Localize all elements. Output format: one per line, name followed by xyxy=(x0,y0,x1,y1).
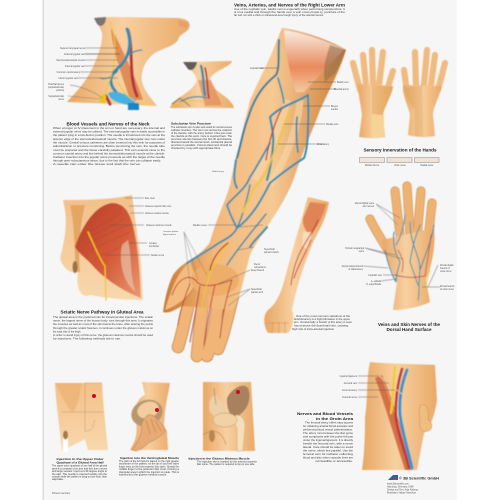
right palm and wrist xyxy=(403,85,442,137)
neck labels xyxy=(48,47,86,101)
heading: sciatic: Sciatic Nerve Pathway in Gluteal Area xyxy=(60,310,144,314)
fingers xyxy=(353,50,393,90)
arm labels: palmar arch xyxy=(251,291,264,294)
palmar arteries xyxy=(172,277,232,345)
arm labels: Radial artery xyxy=(212,170,225,173)
heading: subclavian: Subclavian Vein Puncture xyxy=(171,122,211,126)
pale tendons xyxy=(121,240,136,292)
logo details: www.3bscientific.com xyxy=(387,482,409,486)
upper arm labels: Basilic vein xyxy=(337,82,349,84)
subclavian vein xyxy=(201,66,205,95)
dorsal nerve xyxy=(425,270,430,288)
text block: subclavian: puncture site lies between the first rib and clavicle, xyxy=(171,137,232,141)
quadrant grid xyxy=(62,383,103,431)
text block: fist caption xyxy=(292,314,352,331)
logo details: Illustration: Holger Vanselow xyxy=(387,492,416,494)
upper arm labels: tendon xyxy=(331,108,339,111)
wrist pale panel xyxy=(372,115,384,137)
median cubital vein xyxy=(267,95,308,180)
hip joint xyxy=(213,413,237,427)
text block: subclavian xyxy=(171,125,233,150)
text block: ventrogluteal: middle finger to the posterior iliac crest, forming a xyxy=(119,468,180,471)
text block: neck: common carotid artery and lies behind the sternocleidomastoid muscle at the clavicle. xyxy=(53,151,165,155)
groin labels: Femoral artery xyxy=(342,389,358,392)
neck labels: External jugular vein xyxy=(64,53,86,56)
text block: neck: anterior edge of the sternocleidomastoid muscle. The internal jugular vein runs under xyxy=(53,137,165,141)
illustration: ventrogluteal xyxy=(128,382,170,451)
gluteal skin xyxy=(60,195,143,300)
muscle edge xyxy=(381,376,412,470)
dorsal hand labels: A. radialis xyxy=(371,280,382,283)
sensory zone stripes xyxy=(372,85,393,115)
cleft xyxy=(63,438,68,452)
text block: ventrogluteal: triangular area in which the injection is made. This is xyxy=(119,471,180,474)
text block: sciatic xyxy=(53,315,153,341)
text block: upper quadrant: the skin. The needle is inserted quickly into the xyxy=(52,473,108,476)
text block: groin: The artery runs between the iliac spine xyxy=(303,431,353,435)
heading line two: Dorsal Hand Surface xyxy=(386,327,432,332)
median forearm vein xyxy=(187,117,298,263)
forearm muscle xyxy=(303,202,326,236)
dorsal hand labels: and nerves xyxy=(363,205,375,208)
finger fills xyxy=(178,296,233,356)
dorsal arteries xyxy=(395,235,431,277)
forearm arteries xyxy=(291,220,318,285)
genitals xyxy=(419,405,432,431)
palm nerve xyxy=(202,268,212,312)
text block: subclavian: checked by x-ray with appropriate films. xyxy=(171,146,221,150)
dorsal hand labels: of radial artery xyxy=(348,268,364,271)
inguinal ligament xyxy=(379,376,412,402)
neck labels: nerve xyxy=(58,98,65,101)
text block: neck: through open subcutaneous tissue, due to the fact that the vein can collapse easily. xyxy=(53,159,161,163)
legend: sensory nerves: Radial nerve xyxy=(421,164,434,167)
heading: groin xyxy=(297,411,354,421)
text block: sciatic: through the greater sciatic foramen, it continues under the gluteus maximus on xyxy=(53,326,153,330)
arm labels: Deep branch xyxy=(251,269,265,272)
upper arm labels: Ulnar artery xyxy=(317,143,330,146)
arm labels: digital arteries xyxy=(163,233,176,236)
back skin xyxy=(203,382,255,451)
text block: neck: external jugular veins may be utilized. The external jugular vein is easily accessible in xyxy=(53,130,165,134)
arm labels: palmar branch xyxy=(264,251,279,254)
groin label lines xyxy=(358,376,395,397)
text block: sciatic: the muscles as well as most of the skin below the knee. After leaving the pelvis xyxy=(53,322,153,326)
injection point xyxy=(92,394,96,398)
gluteal labels: Greater xyxy=(149,242,157,245)
logo details: Hamburg, Germany, 1998 xyxy=(387,486,414,488)
groin labels: Femoral vein xyxy=(344,382,358,385)
illustration: gluteal region xyxy=(60,195,150,300)
gluteal labels xyxy=(145,197,172,257)
neck labels: Supraclavicular xyxy=(48,95,64,98)
text block: upper quadrant: and large vessels. Inject at a 90 degree angle to xyxy=(52,470,108,473)
accessory vein xyxy=(278,78,284,103)
text block: gluteus medius xyxy=(197,460,257,466)
text block: gluteus medius: The injection site is marked by the anterior superior xyxy=(197,460,257,464)
forearm muscle tendons xyxy=(255,100,300,185)
right hand fingers xyxy=(404,50,445,92)
text block: neck: the muscle. Central venous catheters are often inserted into this vein for purposes of xyxy=(53,141,165,145)
sartorius muscle xyxy=(375,375,413,470)
neck labels: Brachial plexus xyxy=(48,83,65,86)
text block: fist caption: One of the most common variations of the xyxy=(296,314,350,318)
legend: sensory nerves: Ulnar nerve xyxy=(394,164,407,167)
ilium xyxy=(227,386,250,417)
thigh skin xyxy=(362,362,437,470)
gluteal label lines xyxy=(105,198,150,255)
footer note: Printed in Germany xyxy=(52,492,71,495)
femoral artery xyxy=(396,369,409,468)
dorsal hand labels: Dorsal carpal branch xyxy=(342,265,364,268)
heading: groin: Nerves and Blood Vessels xyxy=(297,411,353,416)
basilic vein xyxy=(237,95,308,228)
text block: subclavian: directed toward the sternal notch. Accidental pleural xyxy=(171,140,232,144)
muscle xyxy=(198,80,222,106)
femoral vein xyxy=(400,370,412,468)
dorsal hand right labels: of ulnar nerve xyxy=(440,288,455,291)
text block: subclavian: catheter insertion. The vein runs across the midpoint xyxy=(171,128,232,132)
arm labels: Median nerve xyxy=(193,224,208,227)
pelvis bones xyxy=(209,395,225,426)
arm labels: retinaculum xyxy=(254,266,266,269)
text block: subclavian: of the clavicle, with the artery behind. It lies just under xyxy=(171,131,232,135)
cubital labels xyxy=(259,68,336,144)
arm labels xyxy=(163,170,279,294)
gluteus maximus xyxy=(75,203,141,298)
finger outlines xyxy=(370,186,432,252)
gluteal labels: Gluteus medius muscle xyxy=(145,212,170,215)
text block: neck xyxy=(53,126,165,166)
upper arm labels: Median vein xyxy=(326,124,339,126)
heading: upper quadrant: Injection in the Upper Outer xyxy=(56,457,105,461)
text block: sciatic: the back side of the thigh. xyxy=(53,329,81,333)
finger lines xyxy=(146,419,161,434)
upper arm labels: Brachial artery xyxy=(334,88,350,91)
dorsal hand labels: Cephalic vein xyxy=(368,275,383,277)
fist fingers xyxy=(268,322,289,333)
logo details xyxy=(387,482,418,494)
dorsal hand right labels: Dorsal digital xyxy=(440,264,454,267)
thumb xyxy=(165,262,197,310)
dorsal hand labels: Dorsal metacarpal xyxy=(345,247,364,250)
text block: groin: performing blood vessel catheterization. xyxy=(303,428,353,432)
text block: groin: the nerve, which lies parallel. Use the xyxy=(303,448,353,452)
heading: dorsal hand: Veins and Skin Nerves of the xyxy=(378,322,441,327)
logo details: Design and Text: Anja Kolberg xyxy=(387,488,418,492)
gluteal labels: Iliac crest xyxy=(145,197,155,200)
text block: sciatic: nerve, the largest nerve of the human body, runs through this area. It originates xyxy=(53,319,153,323)
gluteal labels: Gluteus maximus muscle xyxy=(146,224,172,227)
iliac bone xyxy=(128,395,166,431)
dorsal hand labels xyxy=(342,202,383,286)
text block: groin: femoral vein for catheter collecting xyxy=(303,452,353,456)
back of hand xyxy=(382,228,435,310)
subclavian blue stem xyxy=(128,103,139,110)
upper arm labels: Cephalic vein xyxy=(250,68,265,70)
femur xyxy=(235,415,245,451)
text block: neck: When a longer or IV placement in the arm or hand are necessary, the internal and xyxy=(53,126,165,130)
text block: upper quadrant: aspirate. xyxy=(52,478,64,481)
arm and palm xyxy=(163,28,346,313)
illustration: upper outer quadrant xyxy=(55,383,108,452)
cephalic vein xyxy=(237,40,279,158)
text block: groin: blood and also when vascular lines are xyxy=(303,456,353,460)
upper arm labels xyxy=(250,68,350,146)
text block: fist caption: brachial artery is a high bifurcation in the upper xyxy=(294,317,350,321)
heading: upper quadrant: Quadrant of a Gluteal Area Half xyxy=(56,460,104,464)
legend: sensory nerves: Median Nerve xyxy=(365,164,380,167)
text block: sciatic: In order to avoid injury of this nerve, the gluteus maximus muscle should be used xyxy=(53,333,153,337)
text block: sciatic: for injections. The following methods are in use. xyxy=(53,337,121,341)
inner pelvis xyxy=(135,399,161,421)
hair xyxy=(94,17,106,26)
dorsal veins xyxy=(385,215,434,300)
dorsal hand right labels: ulnar nerve xyxy=(440,270,452,273)
sternocleidomastoid muscle xyxy=(111,28,143,100)
text block: groin: and symphysis with the pulse felt just xyxy=(303,434,353,438)
thumb crease xyxy=(176,282,197,307)
groin labels xyxy=(340,375,358,399)
logo mark xyxy=(388,475,398,480)
neck labels: Sternocleidomastoid muscle xyxy=(56,59,86,62)
median nerve xyxy=(243,110,290,212)
illustration: main arm and hand xyxy=(163,28,346,356)
heading: upper quadrant xyxy=(56,457,105,464)
gluteal labels: trochanter xyxy=(149,245,160,248)
illustration: gluteus medius xyxy=(203,382,255,451)
dorsal hand labels: N. superficialis xyxy=(366,283,382,286)
text block: groin: under the inguinal ligament. It is directly xyxy=(303,438,353,442)
neck skin xyxy=(67,17,190,106)
text block: groin xyxy=(303,420,353,463)
text block: subclavian: The subclavian vein is also well-suited for central venous xyxy=(171,125,233,129)
text block: neck: administration or pressure monitoring. Before puncturing the vein, the needle tube xyxy=(53,144,165,148)
text block: ventrogluteal xyxy=(119,460,180,477)
sciatic nerve xyxy=(88,232,105,266)
text block: gluteus medius: iliac spine. The patient is required to lay on one side. xyxy=(197,463,255,466)
striped sensory area xyxy=(405,85,423,137)
muscle fibres xyxy=(86,212,132,258)
text block: neck: A needle can enter the tissue and stab the nerve. xyxy=(53,162,141,166)
injector hand xyxy=(132,415,165,451)
cleft xyxy=(209,430,215,442)
plexus vessels xyxy=(180,97,207,102)
subclavian vein xyxy=(108,92,136,106)
forearm xyxy=(264,197,329,333)
text block: neck: the patient lying in a low-flexion position. The needle is introduced into the vein at the xyxy=(53,133,165,137)
carotid artery xyxy=(128,30,137,96)
dorsal hand right labels xyxy=(440,264,455,291)
upper arm labels: Biceps xyxy=(331,106,339,108)
illustration: groin xyxy=(358,362,437,470)
antecubital fan muscle xyxy=(284,30,344,92)
buttock skin xyxy=(55,383,108,451)
heading: ventrogluteal: Injection into the Ventrogluteal Muscle xyxy=(120,456,179,460)
text block: main: is on a medial and through the hands over a vein cross proper-ly, puncture of the xyxy=(234,10,345,14)
groin labels: Femoral nerve xyxy=(342,396,358,399)
palm center xyxy=(191,264,239,296)
illustration: dorsal hand xyxy=(363,186,440,310)
logo mark accent xyxy=(392,477,398,480)
arm labels: Flexor xyxy=(254,263,261,266)
text block: ventrogluteal: The palm of the left hand is placed on the right greater xyxy=(119,460,179,463)
lips xyxy=(178,20,189,28)
neck labels: Common carotid artery xyxy=(57,71,81,74)
dorsal hand label lines xyxy=(363,204,440,287)
heading: main: Veins, Arteries, and Nerves of the Right Lower Arm xyxy=(234,2,345,8)
label lines xyxy=(68,48,122,99)
gluteal labels: Gluteus superior iliac vein xyxy=(145,205,172,208)
wrist label dashed lines xyxy=(184,232,207,285)
neck labels: Inferior jugular vein xyxy=(58,77,79,80)
neck labels: Superior laryngeal nerve xyxy=(60,47,86,50)
text block: ventrogluteal: finger rests on the front superior iliac spine. Spread the xyxy=(119,465,180,468)
text block: subclavian: puncture is possible. Correct placement should be xyxy=(171,143,233,147)
text block: groin: beside the femoral vein, with a nerve xyxy=(303,442,353,446)
radial artery xyxy=(210,108,282,270)
hip skin xyxy=(130,382,170,450)
text block: sciatic: The gluteal area is the preferred site for intramuscular injections. The sciatic xyxy=(53,315,153,319)
text block: main xyxy=(234,7,345,17)
text block: upper quadrant: The upper outer quadrant of one half of the gluteal xyxy=(52,464,108,468)
groin labels: Inguinal ligament xyxy=(340,375,357,378)
text block: fist caption: found above the thumbnail vein, causing xyxy=(294,323,348,327)
text block: fist caption: high risk of intra-arterial injection. xyxy=(292,327,335,331)
heading: gluteus medius: Injection in the Gluteus Minimus Muscle xyxy=(188,456,250,460)
logo name: © 3B Scientific GmbH xyxy=(399,476,440,480)
arm labels: Superficial xyxy=(264,248,275,251)
text block: groin: for obtaining arterial blood samples and xyxy=(303,424,353,428)
elbow pale xyxy=(302,232,312,250)
text block: neck: must be prepared and the tissue carefully palpated. This vein extends close to the xyxy=(53,148,165,152)
dorsal hand right labels: branch of xyxy=(440,267,450,270)
text block: fist caption: arm. Occasionally, a branch of this artery is seen xyxy=(294,320,352,324)
neck labels: portion) xyxy=(56,89,64,92)
text block: subclavian: the clavicle at this point. Care is required here. The xyxy=(171,134,233,138)
hair xyxy=(183,62,197,70)
gluteal shading xyxy=(70,205,85,272)
neck labels: Internal jugular vein xyxy=(65,65,86,68)
dorsal hand labels: veins xyxy=(359,251,365,253)
heading: groin: in the Groin Area xyxy=(316,416,354,421)
finger fills xyxy=(370,186,432,252)
injection point xyxy=(236,390,240,394)
text block: upper quadrant: area is a constant of an arm and free from nerves xyxy=(52,467,108,470)
text block: groin: not feasible or accessible. xyxy=(315,459,353,463)
shadow at arm top xyxy=(324,45,346,82)
illustration: subclavian puncture neck xyxy=(170,61,234,108)
dorsal hand labels: Dorsal digital veins xyxy=(355,202,375,205)
buttock curve xyxy=(203,431,226,445)
illustration: fist forearm xyxy=(264,197,329,333)
hand label lines xyxy=(208,225,263,306)
text block: groin: The femoral artery offers easy access xyxy=(305,420,353,424)
gluteal labels: Sciatic nerve xyxy=(151,254,165,257)
heading: neck: Blood Vessels and Nerves of the Neck xyxy=(66,122,150,126)
heading: sensory: Sensory Innervation of the Hands xyxy=(364,148,437,152)
arm labels: Superficial xyxy=(251,288,262,291)
dorsal hand right labels: Dorsal branch xyxy=(440,285,455,288)
finger outlines xyxy=(178,296,233,356)
small neck skin xyxy=(170,61,234,108)
palm and wrist xyxy=(358,84,393,138)
illustration: neck side view xyxy=(67,17,190,110)
text block: upper quadrant xyxy=(52,464,108,481)
femoral nerve xyxy=(391,367,395,413)
text block: main: Use of the cephalic vein, basilic vein is especially when performing venipuncture. It xyxy=(234,7,345,11)
cleft shadow xyxy=(63,430,68,440)
cleft shadow xyxy=(72,261,78,273)
brachial plexus nerves xyxy=(100,22,150,105)
outer edge vein xyxy=(234,160,267,247)
injection point xyxy=(155,408,159,412)
text block: main: far can run with a thick or ultrasound-level tough injury of the arterial nerves. xyxy=(234,13,324,17)
illustration: palmar hand sensory xyxy=(353,50,445,138)
logo: 3B Scientific xyxy=(387,475,440,494)
neck labels: (supraclavicular xyxy=(48,86,64,89)
skin shading xyxy=(55,383,82,412)
text block: neck: Catheter insertion into the jugular veins proceeds as with the target of the needle xyxy=(53,155,165,159)
text block: upper quadrant: muscle while the patient is lying on one side, then xyxy=(52,476,108,478)
legend: sensory nerves xyxy=(360,158,439,167)
spine line xyxy=(214,388,216,405)
subclavian artery xyxy=(106,96,110,104)
arm labels: Common palmar xyxy=(163,230,179,233)
text block: ventrogluteal: injected into the gluteus medius muscle. xyxy=(119,474,167,477)
jugular veins xyxy=(111,29,130,92)
text block: ventrogluteal: trochanter of the patient, so the tip of your left index xyxy=(119,463,180,466)
text block: groin: lateral. Care should be taken to avoid xyxy=(303,445,353,449)
